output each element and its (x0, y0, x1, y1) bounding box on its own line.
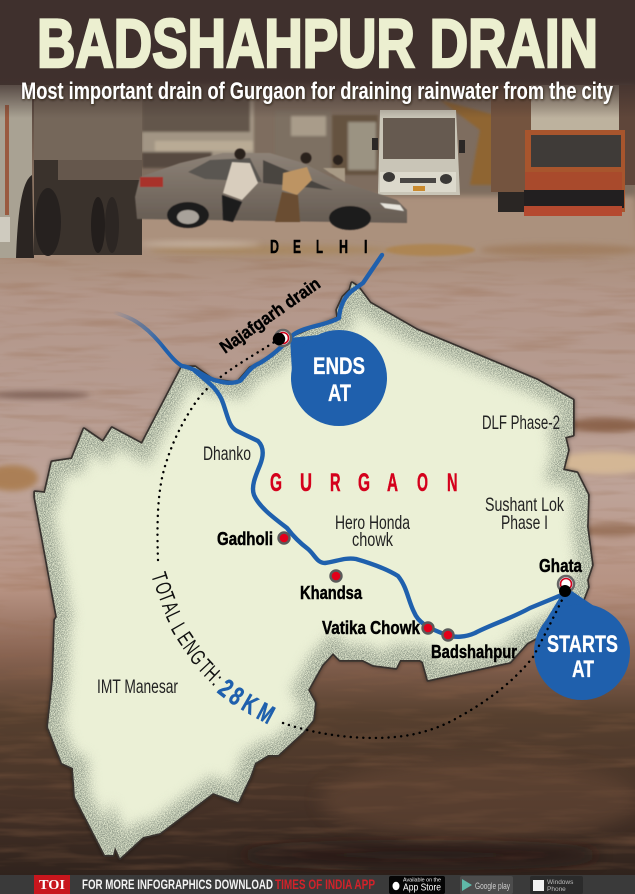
badge: Google play: Google play (475, 881, 510, 891)
label: Gurgaon: A (387, 469, 398, 497)
marker: Najafgarh end point (273, 330, 291, 346)
label: total length 28 km: T (154, 589, 180, 606)
label: total length 28 km: A (157, 598, 184, 617)
label: Delhi: E (293, 237, 301, 257)
label: Delhi: D (270, 237, 279, 257)
place labels: regular (97, 413, 564, 698)
label: Gurgaon: O (417, 469, 428, 497)
label: Najafgarh drain: Najafgarh drain (216, 273, 324, 357)
label: Delhi: H (339, 237, 348, 257)
dotted total length arc (157, 339, 533, 738)
place labels: bold: Gadholi (217, 529, 273, 549)
marker: Khandsa (330, 570, 342, 582)
place labels: regular: Phase I (501, 513, 548, 534)
label: total length 28 km: 8 (224, 681, 250, 711)
label: Delhi: L (316, 237, 323, 257)
TOI logo: TOI (39, 877, 65, 892)
photo backdrop (140, 85, 635, 200)
place labels: regular: chowk (352, 530, 393, 551)
label: Gurgaon (270, 469, 458, 497)
footer bar (0, 875, 635, 894)
TOI logo (34, 875, 70, 894)
label: Gurgaon: G (270, 469, 282, 497)
label: Gurgaon: U (300, 469, 312, 497)
marker: Ghata start point (558, 576, 574, 597)
men pushing the car (222, 148, 345, 222)
label: total length 28 km: : (207, 670, 227, 691)
place labels: bold: Ghata (539, 556, 583, 576)
label: Gurgaon: G (358, 469, 370, 497)
grey car (135, 153, 407, 230)
label: total length 28 km: H (200, 661, 224, 686)
place labels: regular: IMT Manesar (97, 677, 178, 698)
label: total length 28 km: K (237, 688, 263, 720)
place labels: regular: Dhanko (203, 444, 251, 465)
white bus (372, 110, 465, 195)
callout: ends at (290, 330, 387, 426)
place labels: regular: Sushant Lok (485, 495, 564, 516)
badge: Windows Phone: Phone (547, 886, 566, 893)
photo: flooded street with stranded vehicles (0, 85, 635, 258)
left truck (0, 85, 142, 258)
place labels: bold (217, 529, 583, 662)
label: total length 28 km: G (185, 645, 211, 670)
river: Badshahpur drain route (182, 255, 564, 637)
label: total length 28 km: O (150, 579, 177, 597)
label: total length 28 km (147, 569, 279, 730)
label: total length 28 km: M (253, 697, 279, 730)
Eicher truck (491, 85, 635, 216)
top shade behind title (0, 0, 635, 118)
marker: Gadholi (278, 532, 290, 544)
badge: App Store: Available on the (403, 878, 441, 884)
callout: starts at: AT (572, 656, 594, 683)
label: Gurgaon: N (447, 469, 458, 497)
badge: Windows Phone: Windows (547, 879, 574, 886)
dotted arc over callout (533, 592, 566, 657)
place labels: regular: Hero Honda (335, 513, 410, 534)
label: Delhi (270, 237, 368, 257)
callout: ends at: AT (328, 380, 351, 407)
place labels: bold: Vatika Chowk (322, 618, 421, 638)
label: total length 28 km: T (147, 569, 173, 585)
label: total length 28 km: T (193, 655, 218, 678)
marker: Vatika Chowk (422, 622, 434, 634)
label: total length 28 km: 2 (213, 673, 239, 703)
place labels: bold: Khandsa (300, 583, 363, 603)
back truck (142, 85, 254, 168)
water surface (100, 196, 635, 256)
place labels: regular: DLF Phase-2 (482, 413, 560, 434)
label: total length 28 km: L (166, 618, 192, 638)
badge: App Store (389, 876, 445, 894)
badge: App Store: App Store (403, 882, 441, 894)
label: total length 28 km: L (161, 607, 187, 625)
marker: Badshahpur (442, 630, 454, 640)
callout: starts at (534, 587, 630, 700)
label: total length 28 km: N (178, 636, 204, 659)
label: Gurgaon: R (330, 469, 340, 497)
badge: Windows Phone (530, 876, 583, 894)
badge: Google play (460, 876, 513, 894)
map of Gurgaon (35, 283, 592, 858)
place labels: bold: Badshahpur (431, 642, 517, 662)
river: Najafgarh drain (113, 312, 182, 366)
label: total length 28 km: E (172, 627, 198, 649)
app name: TIMES OF INDIA APP (275, 876, 375, 892)
callout: ends at: ENDS (313, 353, 365, 380)
distant vehicles (275, 100, 495, 185)
download call to action: FOR MORE INFOGRAPHICS DOWNLOAD (82, 876, 273, 892)
label: Delhi: I (364, 237, 368, 257)
